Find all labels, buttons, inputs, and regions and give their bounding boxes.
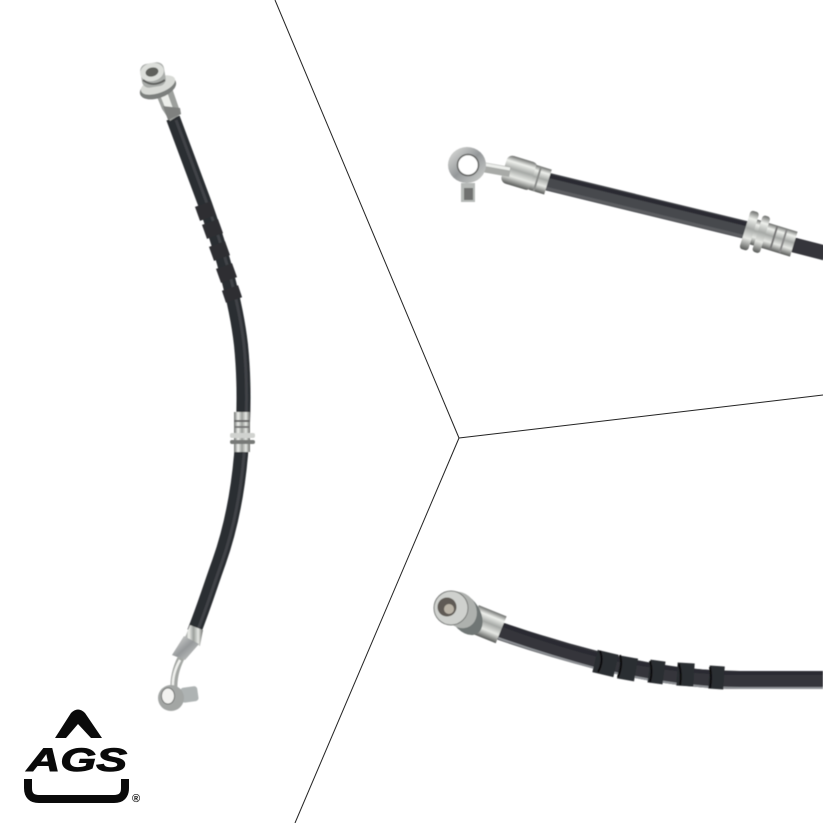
hose sleeves <box>203 204 234 300</box>
hose sleeves <box>595 661 724 678</box>
middle collar <box>230 412 255 452</box>
logo triangle top <box>55 710 102 738</box>
banjo tube <box>482 167 510 172</box>
AGS logo <box>26 710 140 805</box>
hose body <box>500 631 823 680</box>
logo bracket <box>28 779 125 799</box>
lower banjo fitting <box>158 625 203 711</box>
hose body <box>173 118 247 632</box>
upper end fitting <box>137 60 181 121</box>
threaded fitting <box>434 585 507 643</box>
collar <box>739 210 800 263</box>
top right view: banjo end and collar <box>448 147 823 263</box>
hose body <box>545 175 823 253</box>
bottom right view: threaded end and sleeves <box>434 585 823 688</box>
registered mark: ® <box>132 793 140 805</box>
crimp fitting <box>500 154 552 195</box>
banjo ring <box>448 147 486 202</box>
divider lines <box>275 0 823 823</box>
logo wordmark: AGS <box>26 742 128 778</box>
left view: full hose <box>137 60 255 711</box>
sleeve rings <box>598 651 711 688</box>
